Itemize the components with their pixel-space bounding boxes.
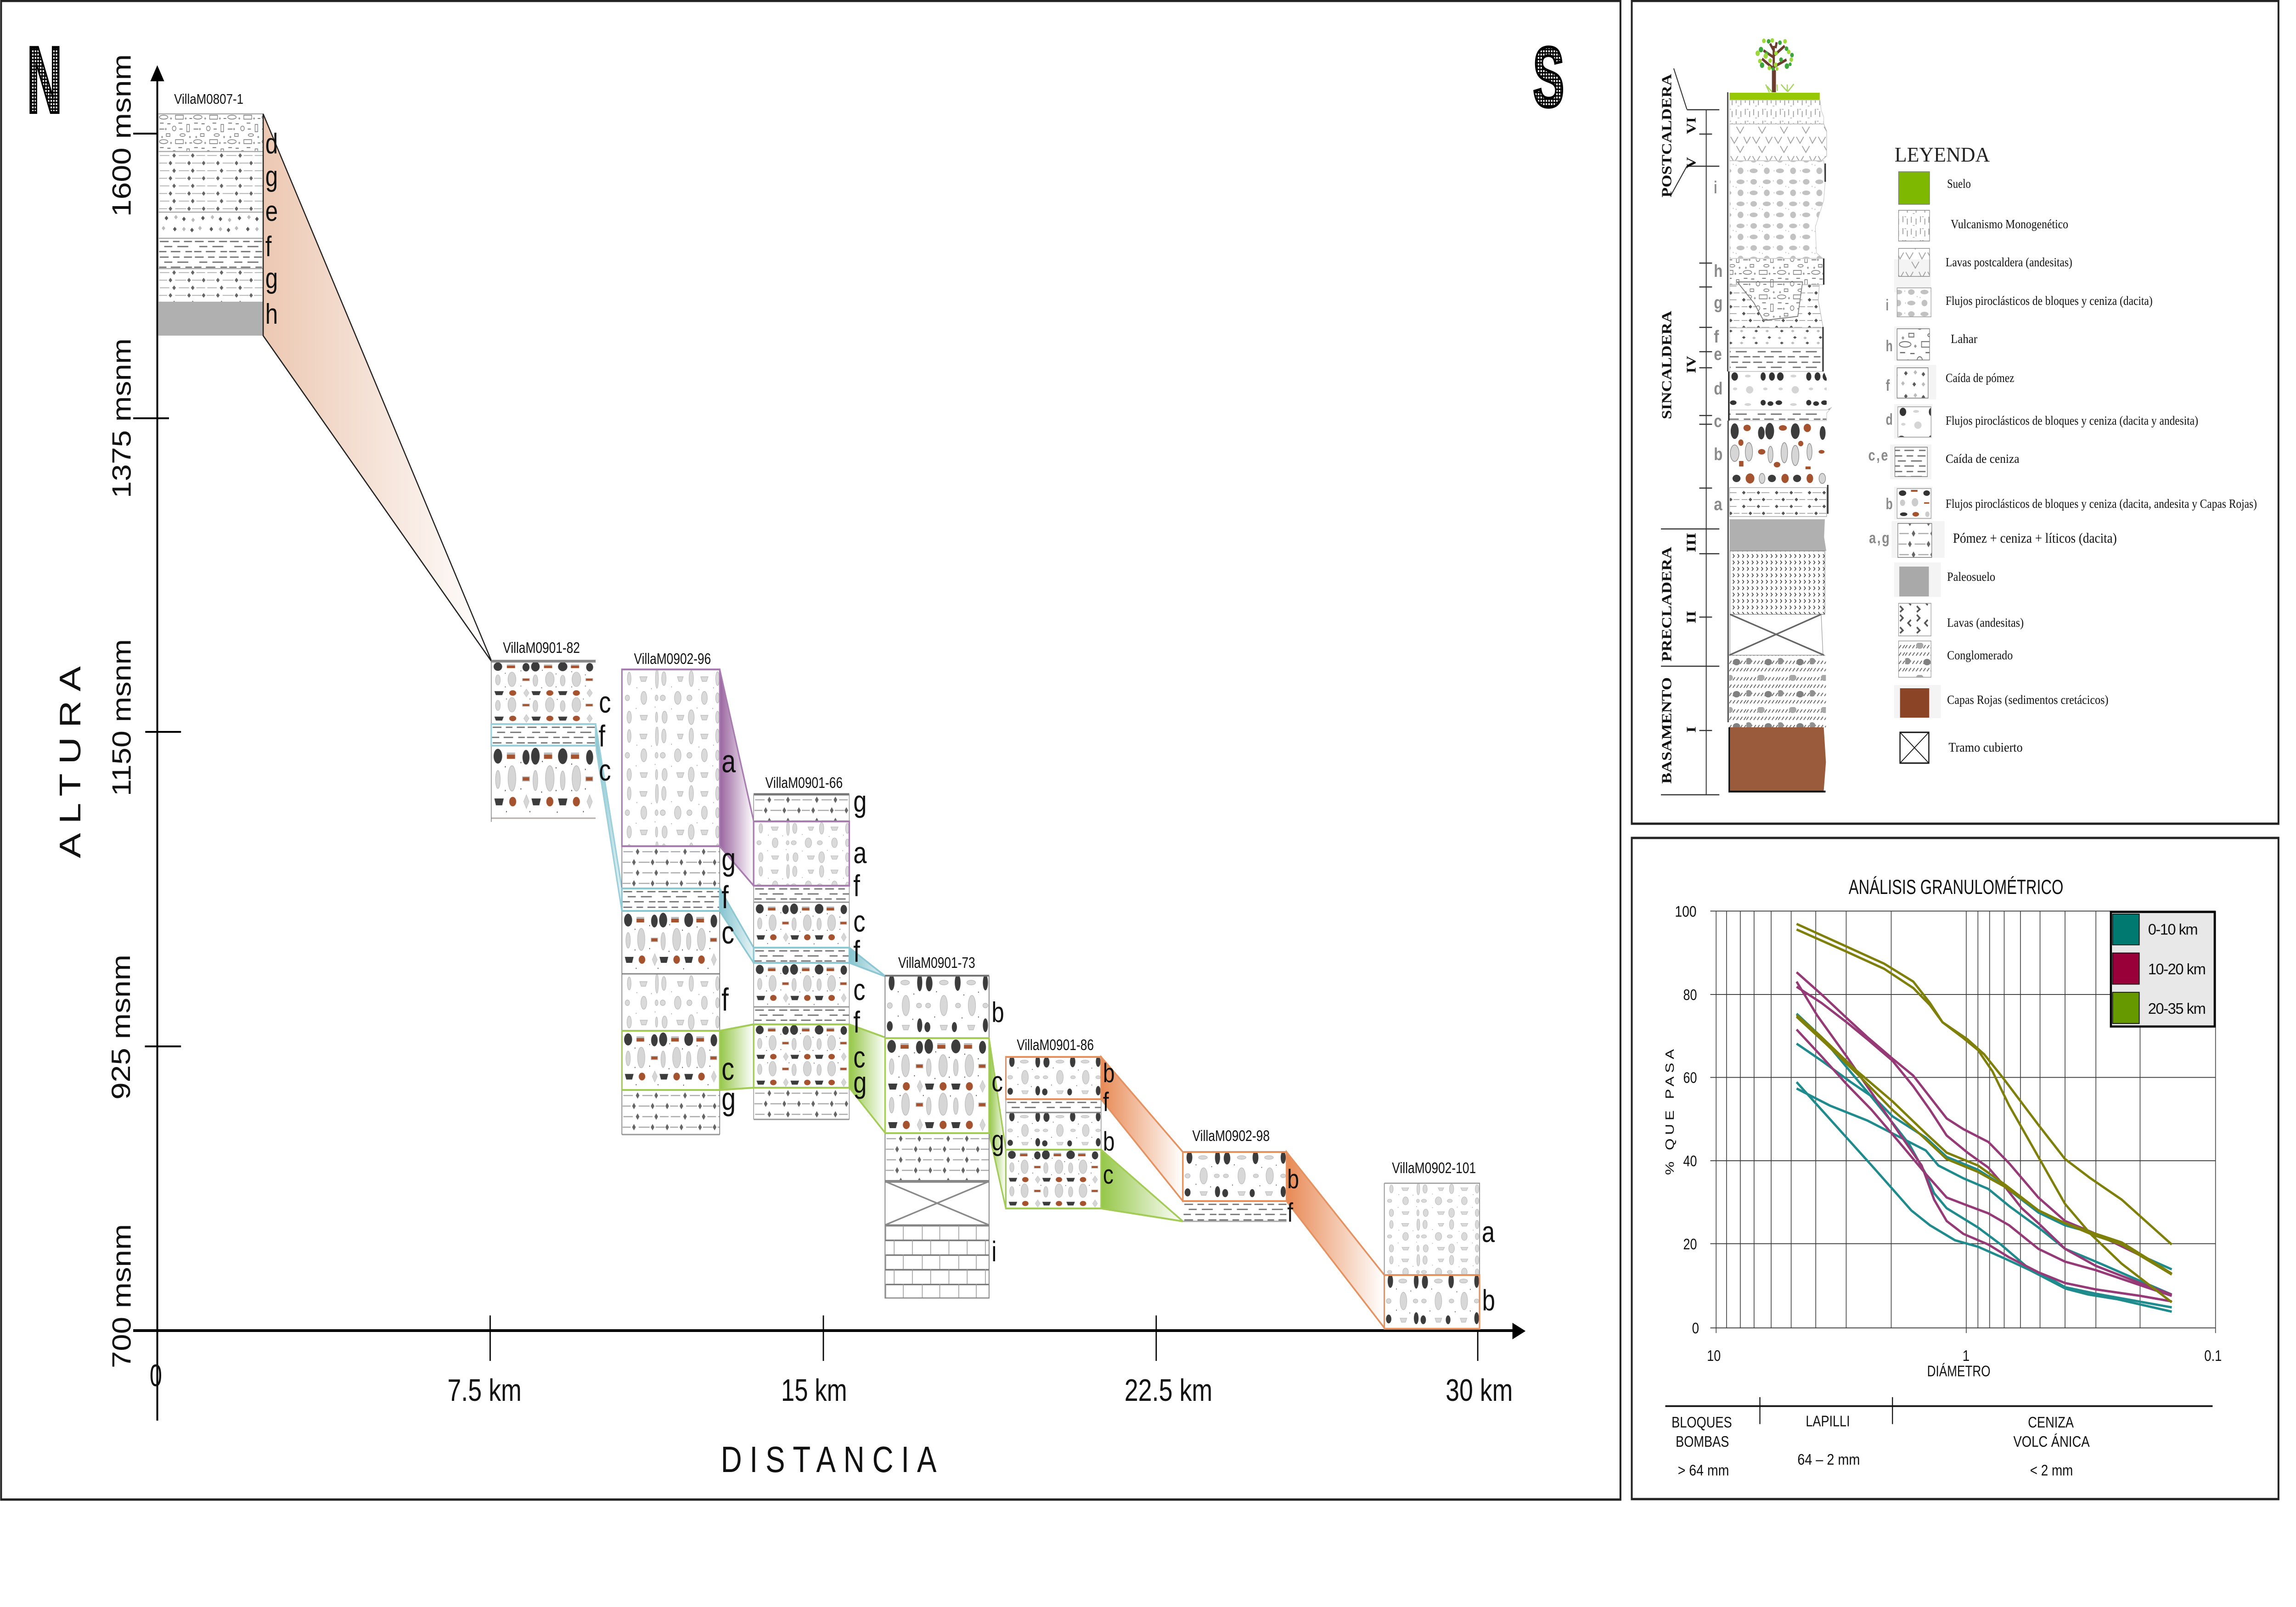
- legend labels: Flujos piroclásticos de bloques y ceniza (dacita y andesita): [1946, 414, 2198, 428]
- curves: 0-10 km: [1796, 1014, 2172, 1312]
- legend: [1868, 143, 2257, 763]
- column: VillaM0807-1: [158, 91, 278, 336]
- icon: south letter S: S: [1533, 29, 1564, 125]
- chart tick labels: [1675, 903, 2222, 1365]
- legend swatches: [1890, 172, 1945, 763]
- generalized stratigraphic column: [1659, 38, 1832, 795]
- legend labels: Capas Rojas (sedimentos cretácicos): [1947, 693, 2108, 707]
- correlation bands between columns: [263, 114, 1384, 1328]
- chart tick labels: 100: [1675, 903, 1697, 921]
- unit letters: c: [721, 1051, 734, 1087]
- Roman numeral units: [1684, 117, 1699, 733]
- icon: north letter N: N: [27, 28, 62, 133]
- legend labels: Lavas (andesitas): [1947, 616, 2024, 630]
- unit letters: [991, 996, 1004, 1267]
- legend labels: Lavas postcaldera (andesitas): [1946, 256, 2072, 270]
- legend labels: Lahar: [1951, 332, 1977, 346]
- Roman numeral units: I: [1684, 726, 1699, 733]
- distance tick labels: [150, 1358, 1513, 1408]
- y-axis title: % QUE PASA: % QUE PASA: [1663, 1049, 1677, 1175]
- column title: VillaM0902-96: [634, 651, 711, 668]
- legend unit letters: d: [1886, 410, 1893, 428]
- unit letters: h: [265, 298, 278, 330]
- grain-size classes: LAPILLI: [1806, 1413, 1850, 1430]
- chart tick labels: 20: [1683, 1236, 1697, 1253]
- column: VillaM0902-96: [622, 651, 736, 1135]
- scale bar and divisions: [1661, 68, 1719, 795]
- legend labels: Suelo: [1947, 177, 1971, 191]
- column title: VillaM0902-98: [1193, 1128, 1270, 1145]
- unit letters: a: [853, 836, 867, 870]
- distance tick labels: 30 km: [1446, 1373, 1513, 1408]
- Roman numeral units: V: [1684, 157, 1699, 169]
- unit letters: [1103, 1059, 1114, 1190]
- layer b: pyroclastic flow with red clasts: [1730, 423, 1826, 483]
- unit letters: e: [265, 195, 278, 227]
- chart tick labels: 1: [1963, 1347, 1970, 1365]
- unit letters: [1714, 178, 1722, 514]
- chart tick labels: 0.1: [2204, 1347, 2222, 1365]
- unit letters: g: [265, 160, 278, 192]
- unit letters: c: [599, 685, 611, 719]
- distance tick labels: 22.5 km: [1125, 1373, 1212, 1408]
- chart legend: [2111, 912, 2215, 1027]
- unit letters: e: [1714, 345, 1722, 364]
- curves: 10-20 km: [1796, 972, 2172, 1301]
- unit letters: f: [853, 1005, 860, 1039]
- unit letters: b: [1103, 1059, 1114, 1088]
- unit letters: f: [721, 880, 729, 915]
- column: VillaM0901-86: [1006, 1037, 1114, 1208]
- grain-size classes: < 2 mm: [2030, 1462, 2073, 1479]
- altitude tick labels: 1600 msnm: [107, 54, 136, 217]
- strata: [158, 114, 263, 336]
- unit letters: c: [853, 904, 865, 938]
- axes: altitude and distance: [133, 65, 1525, 1421]
- Roman numeral units: III: [1684, 533, 1699, 552]
- legend unit letters: f: [1886, 376, 1890, 394]
- unit letters: c: [1103, 1160, 1114, 1190]
- unit letters: h: [1714, 262, 1722, 281]
- chart tick labels: 80: [1683, 987, 1697, 1004]
- unit letters: [265, 128, 278, 330]
- unit letters: g: [991, 1124, 1004, 1156]
- Roman numeral units: IV: [1684, 355, 1699, 373]
- legend labels: Conglomerado: [1947, 649, 2013, 663]
- chart tick labels: 60: [1683, 1069, 1697, 1087]
- legend labels: [1946, 177, 2257, 755]
- altitude tick labels: [106, 54, 136, 1368]
- legend labels: Vulcanismo Monogenético: [1951, 218, 2068, 231]
- column: VillaM0901-73: [885, 955, 1004, 1298]
- strata: [1006, 1057, 1101, 1208]
- column title: VillaM0901-73: [898, 955, 975, 972]
- unit letters: a: [1482, 1216, 1495, 1248]
- panel: grain-size chart frame: [1632, 838, 2279, 1499]
- chart title: ANÁLISIS GRANULOMÉTRICO: [1849, 876, 2063, 899]
- swatch: covered section: [1900, 732, 1929, 763]
- altitude tick labels: 925 msnm: [106, 955, 135, 1100]
- column title: VillaM0901-82: [503, 640, 580, 657]
- plot grid: [1711, 911, 2216, 1333]
- column title: VillaM0807-1: [174, 91, 243, 107]
- strata stack: [1728, 92, 1832, 792]
- column: VillaM0902-98: [1183, 1128, 1299, 1228]
- unit letters: [721, 744, 736, 1117]
- legend unit letters: h: [1886, 337, 1893, 355]
- legend labels: Tramo cubierto: [1948, 740, 2023, 755]
- unit letters: f: [598, 719, 605, 753]
- unit letters: [853, 784, 867, 1099]
- unit letters: f: [853, 934, 860, 968]
- legend labels: Caída de ceniza: [1946, 452, 2020, 466]
- unit letters: b: [1103, 1127, 1114, 1157]
- unit letters: i: [991, 1236, 996, 1267]
- column: VillaM0901-82: [491, 640, 611, 822]
- unit letters: g: [853, 784, 867, 818]
- period names: POSTCALDERA: [1659, 74, 1674, 197]
- legend labels: Caída de pómez: [1946, 371, 2015, 385]
- unit letters: d: [1714, 379, 1722, 399]
- unit letters: f: [853, 869, 860, 903]
- grain-size classes: > 64 mm: [1678, 1462, 1729, 1479]
- grain-size classes: BOMBAS: [1676, 1433, 1729, 1450]
- grain-size classes: VOLC ÁNICA: [2013, 1433, 2090, 1450]
- unit letters: [598, 685, 611, 787]
- unit letters: g: [721, 1081, 736, 1117]
- swatch: flow with red clasts: [1897, 489, 1931, 518]
- legend title: LEYENDA: [1895, 143, 1990, 166]
- period names: PRECLADERA: [1659, 547, 1674, 662]
- unit letters: [1287, 1165, 1299, 1228]
- period names: [1659, 74, 1674, 784]
- chart: grain-size curves: [1665, 876, 2222, 1479]
- unit letters: c: [991, 1066, 1003, 1097]
- Roman numeral units: VI: [1684, 117, 1699, 134]
- unit letters: g: [853, 1065, 867, 1099]
- column title: VillaM0902-101: [1392, 1160, 1476, 1177]
- legend unit letters: [1868, 296, 1893, 547]
- Roman numeral units: II: [1684, 611, 1699, 624]
- column: VillaM0901-66: [754, 775, 867, 1119]
- distance tick labels: 0: [150, 1358, 162, 1393]
- unit letters: f: [1287, 1198, 1293, 1228]
- altitude tick labels: 1150 msnm: [107, 639, 136, 796]
- unit letters: f: [1714, 327, 1719, 347]
- strata: [754, 794, 849, 1119]
- strata: [491, 661, 596, 822]
- unit letters: f: [265, 230, 272, 262]
- period names: SINCALDERA: [1659, 311, 1674, 419]
- altitude tick labels: 700 msnm: [107, 1224, 136, 1368]
- grain-size classes: CENIZA: [2028, 1414, 2074, 1431]
- legend unit letters: c,e: [1868, 446, 1888, 464]
- unit letters: f: [1103, 1088, 1109, 1117]
- soil layer: [1729, 93, 1820, 100]
- axis title: ALTURA: ALTURA: [53, 666, 87, 858]
- strata: [885, 976, 989, 1298]
- period names: BASAMENTO: [1659, 677, 1674, 784]
- unit letters: a: [721, 744, 736, 779]
- grain-size classes: [1665, 1397, 2212, 1479]
- unit letters: b: [1714, 445, 1722, 464]
- chart tick labels: 40: [1683, 1153, 1697, 1170]
- unit letters: g: [265, 262, 278, 294]
- distance tick labels: 15 km: [781, 1373, 847, 1408]
- strata: [622, 669, 720, 1135]
- unit letters: c: [1714, 412, 1722, 431]
- chart tick labels: 0: [1692, 1320, 1699, 1337]
- unit letters: f: [721, 982, 729, 1017]
- unit letters: a: [1714, 495, 1722, 514]
- unit letters: d: [265, 128, 278, 159]
- curves: 20-35 km: [1796, 924, 2172, 1302]
- legend unit letters: a,g: [1869, 529, 1890, 547]
- grain-size classes: BLOQUES: [1671, 1414, 1732, 1431]
- chart legend: 10-20 km: [2148, 961, 2206, 978]
- panel: cross-section frame: [1, 1, 1621, 1500]
- icon: tree: [1756, 38, 1794, 92]
- legend labels: Flujos piroclásticos de bloques y ceniza (dacita, andesita y Capas Rojas): [1946, 497, 2257, 511]
- chart tick labels: 10: [1707, 1347, 1721, 1365]
- chart legend: 20-35 km: [2148, 1000, 2206, 1017]
- unit letters: c: [853, 972, 865, 1006]
- distance tick labels: 7.5 km: [447, 1373, 522, 1408]
- grain-size classes: 64 – 2 mm: [1797, 1451, 1860, 1468]
- column: VillaM0902-101: [1384, 1160, 1495, 1329]
- altitude tick labels: 1375 msnm: [107, 338, 136, 498]
- unit letters: g: [1714, 293, 1722, 313]
- legend labels: Pómez + ceniza + líticos (dacita): [1953, 530, 2117, 546]
- axis title: DISTANCIA: DISTANCIA: [721, 1439, 937, 1480]
- strata: [1183, 1152, 1287, 1221]
- x-axis title: DIÁMETRO: [1927, 1363, 1991, 1380]
- unit letters: c: [721, 915, 734, 950]
- legend unit letters: i: [1886, 296, 1889, 314]
- legend unit letters: b: [1886, 495, 1893, 513]
- unit letters: b: [991, 996, 1004, 1028]
- column title: VillaM0901-66: [765, 775, 843, 792]
- unit letters: c: [853, 1040, 865, 1074]
- unit letters: c: [599, 753, 611, 787]
- panel: stratigraphic column and legend frame: [1632, 1, 2279, 824]
- chart legend: 0-10 km: [2148, 921, 2198, 938]
- legend labels: Paleosuelo: [1947, 570, 1995, 584]
- column title: VillaM0901-86: [1017, 1037, 1094, 1054]
- legend labels: Flujos piroclásticos de bloques y ceniza (dacita): [1946, 294, 2153, 308]
- unit letters: [1482, 1216, 1495, 1317]
- unit letters: b: [1482, 1285, 1495, 1317]
- strata: [1384, 1183, 1480, 1329]
- unit letters: g: [721, 842, 736, 877]
- unit letters: b: [1287, 1165, 1299, 1194]
- unit letters: i: [1714, 178, 1717, 197]
